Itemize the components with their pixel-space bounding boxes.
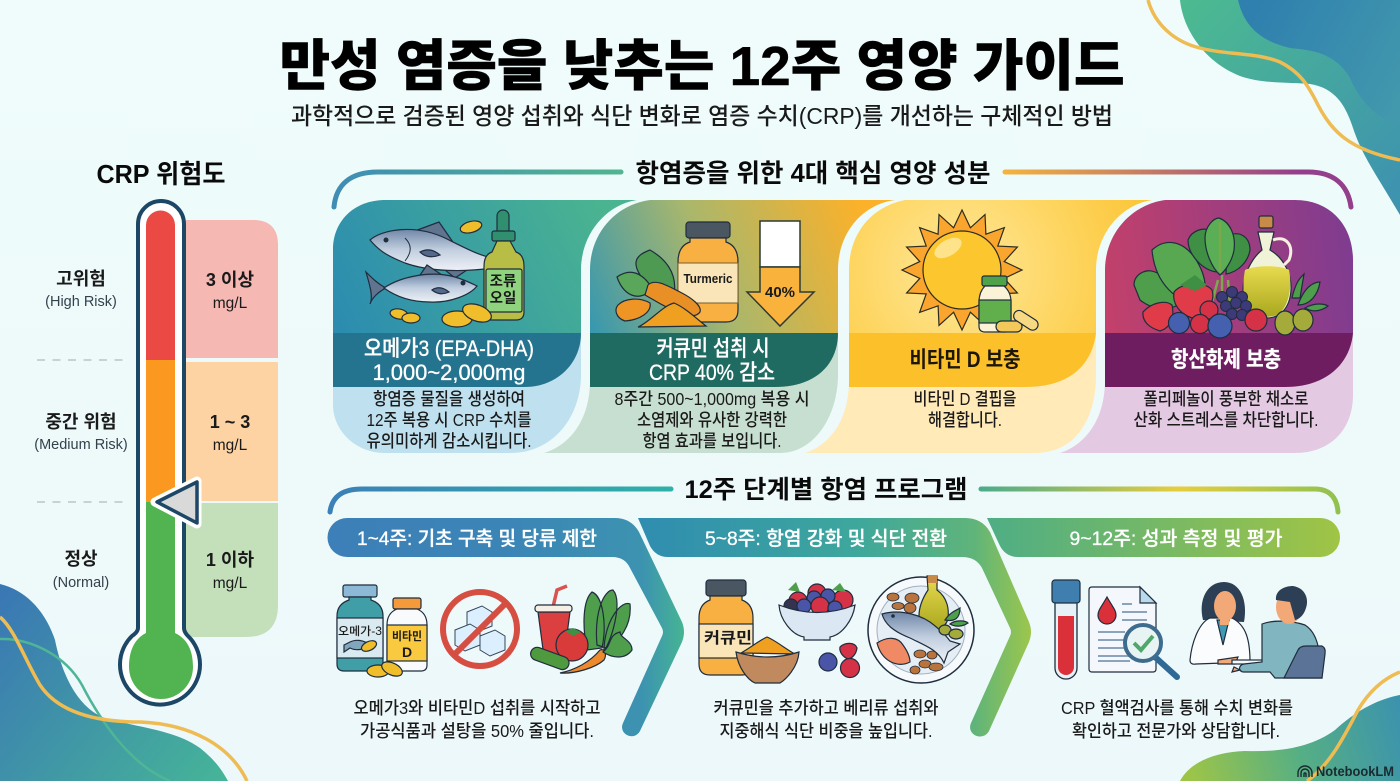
banner label: 5~8주: 항염 강화 및 식단 전환 [705, 528, 947, 550]
decoration: top-right blobs [1148, 0, 1400, 215]
step 3: weeks 9-12 [987, 518, 1340, 741]
card title: 커큐민 섭취 시 [656, 336, 770, 361]
icon: fish and algae oil: 조류 [490, 273, 516, 290]
medium risk label [34, 412, 128, 453]
icon: berries [779, 582, 860, 678]
icon: fish and algae oil [366, 210, 524, 327]
medium risk label: (Medium Risk) [34, 437, 128, 453]
heading: 12-week program: 12주 단계별 항염 프로그램 [684, 476, 968, 504]
panel: omega-3 card [330, 198, 640, 455]
icon: doctor and patient [1190, 582, 1325, 678]
normal value [206, 550, 255, 592]
step text: 커큐민을 추가하고 베리류 섭취와 [714, 698, 938, 718]
watermark: NotebookLM: NotebookLM [1316, 763, 1394, 779]
card text: 소염제와 유사한 강력한 [637, 410, 787, 430]
icon: turmeric jar: 40% [765, 284, 795, 301]
high risk label [45, 269, 117, 310]
normal label: 정상 [64, 549, 98, 569]
icon: turmeric jar [616, 221, 814, 327]
card title: 비타민 D 보충 [910, 347, 1020, 372]
step text [354, 698, 600, 741]
high risk value: mg/L [213, 295, 248, 312]
icon: supplements: 오메가-3 [338, 625, 382, 638]
step text [714, 698, 938, 741]
card text: 항염 효과를 보입니다. [642, 431, 782, 451]
high risk value [206, 270, 255, 312]
step text [1061, 698, 1293, 741]
normal label [53, 549, 109, 591]
normal value: mg/L [213, 575, 248, 592]
card text [1134, 389, 1318, 430]
step text: 가공식품과 설탕을 50% 줄입니다. [360, 721, 594, 741]
chevron banner [328, 518, 684, 736]
card text: 유의미하게 감소시킵니다. [366, 431, 532, 451]
panel: CRP risk thermometer [34, 159, 278, 705]
icon: mediterranean plate [868, 575, 974, 683]
icon: curcumin [699, 580, 799, 683]
decoration: bottom-left blob [0, 584, 247, 781]
icon: vegetables berries and olive oil [1134, 216, 1328, 338]
high risk label: 고위험 [56, 269, 106, 289]
step 1: weeks 1-4 [328, 518, 684, 741]
card text: 해결합니다. [928, 410, 1002, 430]
card text: 8주간 500~1,000mg 복용 시 [614, 389, 810, 409]
card title: 1,000~2,000mg [372, 360, 526, 385]
card text: 폴리페놀이 풍부한 채소로 [1144, 389, 1308, 409]
thermometer [120, 201, 200, 705]
card text: 12주 복용 시 CRP 수치를 [366, 410, 532, 430]
card text [366, 389, 532, 451]
icon: supplements: 비타민 [392, 630, 422, 643]
icon: fish and algae oil: 오일 [490, 290, 516, 307]
medium risk value: 1 ~ 3 [210, 412, 250, 432]
icon: no sugar [443, 592, 517, 666]
decoration: bottom-right blob [1180, 672, 1400, 781]
card title: CRP 40% 감소 [649, 360, 775, 385]
normal value: 1 이하 [206, 550, 255, 570]
subtitle: 과학적으로 검증된 영양 섭취와 식단 변화로 염증 수치(CRP)를 개선하는 구체적인 방법 [291, 103, 1113, 129]
step text: 확인하고 전문가와 상담합니다. [1072, 721, 1280, 741]
icon: blood tube [1052, 580, 1080, 679]
heading: four nutrients: 항염증을 위한 4대 핵심 영양 성분 [636, 160, 990, 188]
card text: 산화 스트레스를 차단합니다. [1134, 410, 1318, 430]
card text: 항염증 물질을 생성하여 [373, 389, 525, 409]
medium risk label: 중간 위험 [45, 412, 117, 432]
banner label: 9~12주: 성과 측정 및 평가 [1070, 528, 1283, 550]
step text: CRP 혈액검사를 통해 수치 변화를 [1061, 698, 1293, 718]
heading: CRP risk: CRP 위험도 [96, 159, 226, 189]
card text [914, 389, 1016, 430]
panel: vitamin D card [800, 198, 1155, 455]
risk value panels [186, 220, 278, 637]
card title [649, 336, 775, 385]
card text [614, 389, 810, 451]
step text: 오메가3와 비타민D 섭취를 시작하고 [354, 698, 600, 718]
icon: supplements: D [402, 644, 412, 660]
chevron banner [987, 518, 1340, 557]
panel: antioxidant card [1050, 198, 1355, 455]
high risk label: (High Risk) [45, 294, 117, 310]
banner label: 1~4주: 기초 구축 및 당류 제한 [357, 528, 597, 550]
icon: report with magnifier [1089, 587, 1177, 677]
normal label: (Normal) [53, 575, 109, 591]
step 2: weeks 5-8 [638, 518, 1031, 741]
pointer marker [155, 481, 197, 524]
high risk value: 3 이상 [206, 270, 255, 290]
panel: curcumin card [540, 198, 900, 455]
card title: 오메가3 (EPA-DHA) [364, 336, 534, 361]
icon: sun and supplement [902, 210, 1040, 332]
card text: 비타민 D 결핍을 [914, 389, 1016, 409]
card title [364, 336, 534, 385]
icon: curcumin: 커큐민 [704, 629, 752, 647]
heading: 12-week program [330, 476, 1338, 512]
title: 만성 염증을 낮추는 12주 영양 가이드 [280, 35, 1124, 97]
icon: healthy food swap [529, 586, 632, 673]
step text: 지중해식 식단 비중을 높입니다. [720, 721, 932, 741]
medium risk value [210, 412, 250, 454]
heading: four nutrients [334, 160, 1351, 207]
icon: supplements [337, 585, 427, 679]
card title: 항산화제 보충 [1171, 347, 1281, 372]
icon: turmeric jar: Turmeric [684, 272, 733, 286]
medium risk value: mg/L [213, 437, 248, 454]
chevron banner [638, 518, 1031, 736]
